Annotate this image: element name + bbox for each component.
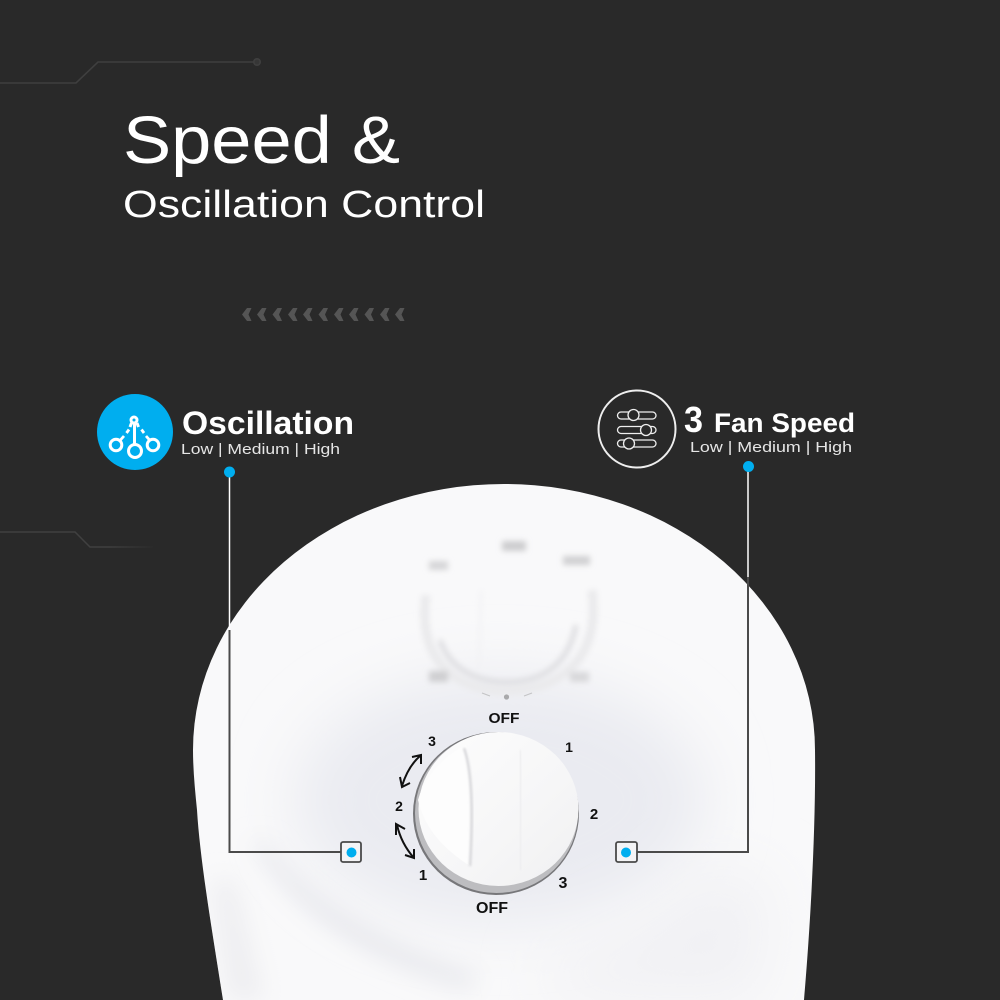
oscillation arrows [396,755,421,858]
recessed panel shading [305,685,695,920]
lower left shadow [276,865,464,984]
fan speed label: Fan Speed [714,408,855,438]
dial labels: OFF [476,900,508,917]
fan speed label: 3 [684,399,703,440]
icon: oscillation [97,394,173,470]
dial labels: 2 [395,798,403,814]
dial labels: 2 [590,806,598,823]
title [123,103,485,226]
callout: oscillation marker [341,842,361,862]
product: fan control top [180,480,830,1000]
oscillation label: Low | Medium | High [181,441,340,458]
callout: oscillation line [224,466,341,852]
dial labels [395,711,598,917]
upper knob indicator dot [482,693,532,700]
dial labels: 3 [559,875,568,892]
dial labels: 3 [428,733,436,749]
blurred upper knob [425,541,593,691]
title: Oscillation Control [123,184,485,226]
dial labels: OFF [488,711,520,727]
callout: fan speed marker [616,842,637,862]
callout: fan speed line [637,461,754,852]
fan speed label [684,399,855,456]
oscillation label [181,405,354,458]
lower right shadow [540,870,770,1000]
chevron row [242,308,404,321]
circuit line: top left [0,59,260,83]
oscillation label: Oscillation [182,405,354,441]
main knob ring [413,732,579,895]
main knob [418,732,578,886]
fan speed label: Low | Medium | High [690,439,852,456]
dial labels: 1 [419,867,427,884]
circuit line: middle left [0,532,153,547]
icon: sliders [598,390,676,468]
lower left edge shadow [206,888,250,999]
dial labels: 1 [565,739,573,755]
title: Speed & [123,103,400,178]
